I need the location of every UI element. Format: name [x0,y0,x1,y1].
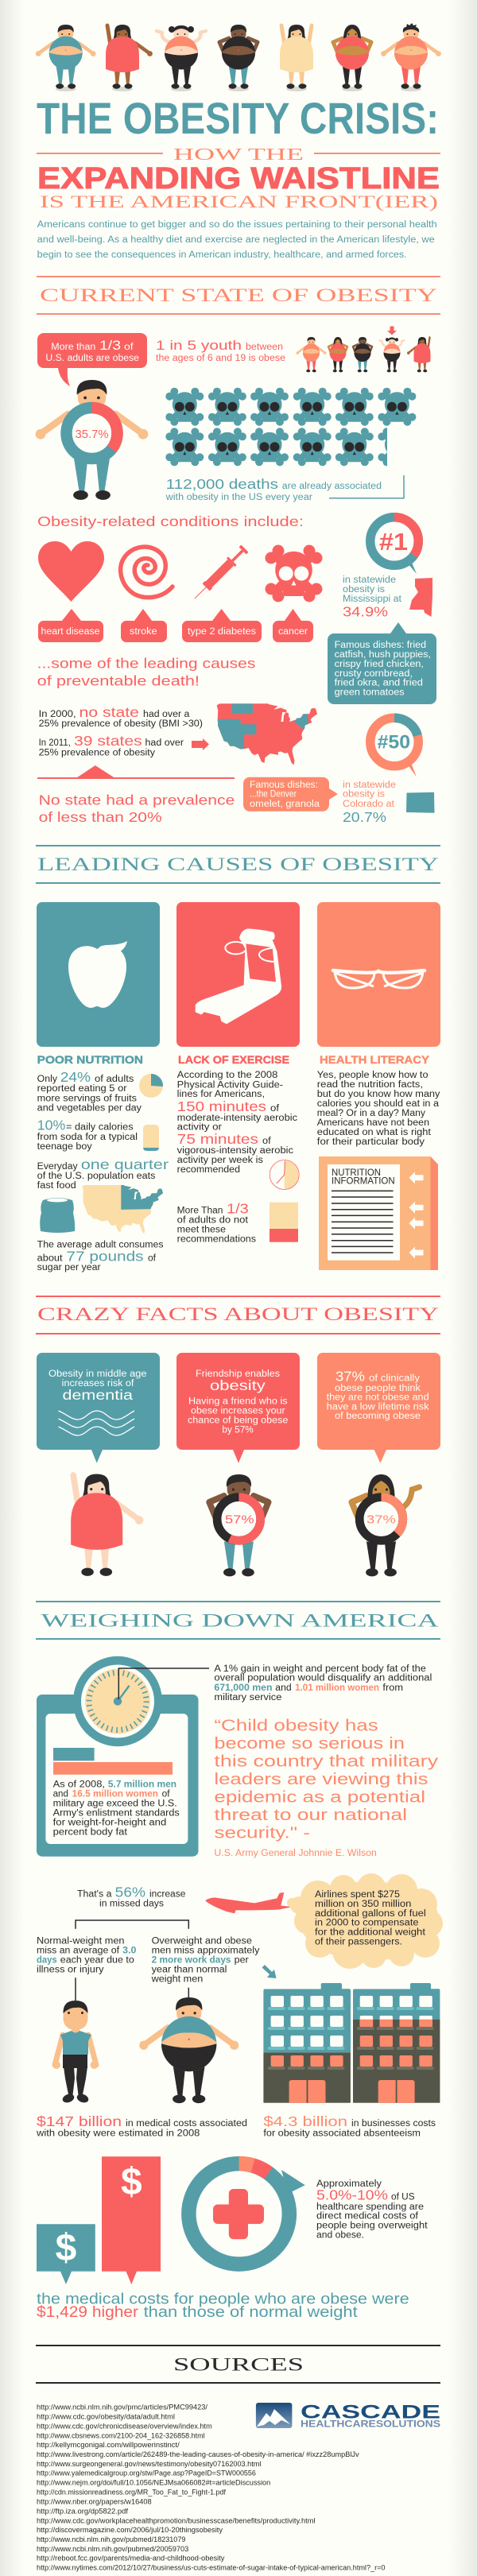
Mississippi stat [343,575,402,620]
callout: Mississippi dishes: crispy fried chicken, [335,660,424,669]
column: poor nutrition: teenage boy [37,1142,92,1152]
rank 1 ring [370,517,418,574]
column: lack of exercise: recommended [177,1165,240,1175]
text: no state under 20% [37,765,235,825]
column: poor nutrition: 10% [37,1118,65,1133]
subtitle: IS THE AMERICAN FRONT(IER) [40,192,438,211]
fact card: friendship: Having a friend who is [188,1397,288,1407]
illustration: weighing scale: for weight-for-height and [53,1819,166,1828]
text: state prevalence comparison: had over [145,738,184,748]
text: no state under 20%: of less than 20% [39,809,162,825]
leader line [118,1668,209,1699]
illustration: weighing scale [37,1656,199,1857]
source list [37,2404,385,2573]
illustration: weighing scale: and [53,1790,68,1799]
icon: cancer skull [266,545,323,602]
Colorado stat: obesity is [343,790,385,800]
source list: http://discovermagazine.com/2006/jul/10-20thingsobesity [37,2526,223,2535]
text: 1% gain: 1.01 million women [295,1683,379,1693]
column: lack of exercise: recommendations [177,1235,256,1245]
text: 1% gain: from [382,1683,403,1693]
illustration: weighing scale: of [162,1790,170,1799]
text: 1% gain: military service [214,1693,281,1702]
column: lack of exercise: vigorous-intensity aerobic [177,1146,293,1156]
section heading: weighing down america: WEIGHING DOWN AMERICA [41,1610,439,1630]
quote: epidemic as a potential [214,1789,425,1807]
stat: $4.3 billion [263,2113,436,2138]
text: healthcare spending: and obese. [316,2230,364,2240]
callout: one third of adults: More than [51,343,95,352]
section heading: leading causes: LEADING CAUSES OF OBESITY [37,854,440,874]
fact card: 37%: of becoming obese [335,1412,421,1421]
text: 1% gain: A 1% gain in weight and percent body fat of the [214,1664,426,1674]
source list: http://www.cbsnews.com/2100-204_162-326858.html [37,2431,205,2440]
condition labels: heart disease [41,627,100,637]
text: leading causes of preventable death [37,656,256,689]
text: medical cost difference: than those of normal weight [144,2304,359,2321]
column: poor nutrition: one quarter [81,1156,169,1172]
fact card: 37%: they are not obese and [327,1393,429,1403]
illustration: right building [353,1983,440,2103]
heading: conditions: Obesity-related conditions include: [37,513,304,529]
column: health literacy: calories you should eat in a [317,1099,440,1109]
text: overweight men: men miss approximately [152,1947,260,1956]
card: poor nutrition apple [37,902,160,1047]
text: normal-weight men: Normal-weight men [37,1937,124,1947]
column: poor nutrition: reported eating 5 or [37,1084,127,1094]
column: poor nutrition: and vegetables per day [37,1104,142,1114]
subtitle [37,145,440,211]
stat: 1 in 5 youth: 1 in 5 youth [156,338,242,353]
column: poor nutrition: of [148,1254,157,1264]
figure: overweight man [139,1997,238,2103]
stat: $4.3 billion: in businesses costs [351,2119,436,2129]
column: poor nutrition: 77 pounds [66,1249,144,1265]
Mississippi stat: obesity is [343,585,385,595]
illustration: weighing scale: 16.5 million women [72,1790,158,1799]
fact card: friendship: by 57% [222,1425,254,1435]
rank 50 ring [370,718,418,777]
text: 56% increase: That's a [77,1890,112,1900]
section heading: crazy facts: CRAZY FACTS ABOUT OBESITY [37,1304,440,1324]
column: health literacy: but do you know how many [317,1090,440,1099]
illustration: weighing scale: As of 2008, [53,1780,105,1790]
column: health literacy: Americans have not been [317,1118,429,1128]
connector lines [76,1978,188,2001]
fact card: 37%: obese people think [335,1384,421,1393]
text: 56% increase: increase [149,1890,185,1900]
source list: http://www.nber.org/papers/w16408 [37,2498,152,2507]
column: lack of exercise: 150 minutes [177,1098,266,1114]
callout: one third of adults [37,333,147,386]
source list: http://www.nejm.org/doi/full/10.1056/NEJMsa066082#t=articleDiscussion [37,2479,270,2488]
column: lack of exercise: of adults do not [177,1216,249,1226]
card: lack of exercise treadmill [176,902,300,1047]
section heading: current state: CURRENT STATE OF OBESITY [40,285,438,305]
quote: this country that military [214,1753,438,1771]
illustration: weighing scale: 5.7 million men [108,1780,176,1790]
text: medical cost difference: $1,429 higher [37,2304,139,2321]
intro text: and well-being. As a healthy diet and exercise are neglected in the American lifestyle, we [37,235,435,245]
callout: Mississippi dishes: catfish, hush puppies, [335,650,431,660]
bar chart: men and women over standards [53,1748,173,1775]
text: healthcare spending: Approximately [316,2179,382,2189]
Mississippi stat: in statewide [343,575,396,585]
callout: Mississippi dishes: Famous dishes: fried [335,641,426,650]
fact card: dementia: Obesity in middle age [48,1369,146,1379]
source list: http://www.surgeongeneral.gov/news/testimony/obesity07162003.html [37,2460,261,2469]
small children row [297,337,431,372]
column: poor nutrition: The average adult consumes [37,1241,164,1250]
text: 1% gain [214,1664,432,1702]
figure with 35.7% ring: 35.7% [75,428,108,441]
icon: medical cross [213,2189,264,2239]
callout: one third of adults: U.S. adults are obese [45,354,139,363]
text: 1% gain: and [275,1683,292,1693]
column: poor nutrition: = daily calories [66,1123,134,1133]
column: lack of exercise: 75 minutes [177,1131,258,1147]
chart: medical cost bars: $ [121,2161,142,2203]
text: overweight men: weight men [150,1974,203,1984]
source list: http://www.cdc.gov/obesity/data/adult.html [37,2413,175,2422]
column: poor nutrition: from soda for a typical [37,1133,138,1142]
fact card: 37%: of clinically [369,1374,420,1384]
text: 56% increase: in missed days [99,1900,164,1909]
text: state prevalence comparison: 39 states [74,733,142,749]
column: poor nutrition: Only [37,1075,57,1084]
text: healthcare spending: direct medical costs of [316,2212,419,2222]
column: poor nutrition: of adults [95,1075,134,1084]
fact card: friendship: chance of being obese [188,1416,288,1426]
stat: 1 in 5 youth: between [246,343,283,352]
source list: http://www.livestrong.com/article/262489-the-leading-causes-of-obesity-in-america/ #ixzz28umpBlJv [37,2450,359,2459]
column: lack of exercise [177,1053,299,1245]
arrow pointing at child [387,326,397,335]
source list: http://www.cdc.gov/chronicdisease/overview/index.htm [37,2422,212,2431]
text: healthcare spending: people being overweight [316,2221,429,2230]
Colorado stat [343,781,396,825]
stat: $147 billion: $147 billion [37,2113,122,2129]
bracket [76,1920,188,1929]
text: overweight men: year than normal [152,1965,227,1974]
Mississippi stat: Mississippi at [343,595,402,604]
illustration: weighing scale: military age exceed the U.S. [53,1799,177,1809]
column: lack of exercise: activity per week is [177,1156,263,1165]
fact card: dementia: increases risk of [62,1379,134,1389]
Mississippi stat: 34.9% [343,604,388,620]
quote: threat to our national [214,1807,407,1824]
condition labels: cancer [278,627,308,637]
fact card: friendship: obesity [210,1377,266,1393]
column: poor nutrition: POOR NUTRITION [37,1053,143,1066]
quote: “Child obesity has [214,1717,378,1734]
column: health literacy: for their particular body [317,1137,425,1147]
condition labels: type 2 diabetes [188,627,256,637]
fact card: 37%: have a low lifetime risk [327,1403,429,1412]
stat: 112,000 deaths [165,475,404,502]
text: 1% gain: overall population would disqualify an additional [214,1674,432,1683]
column: lack of exercise: activity or [177,1123,222,1133]
card: health literacy glasses [317,902,440,1047]
illustration: weighing scale: Army's enlistment standards [53,1809,180,1819]
fact card: 37% [317,1353,440,1463]
fact card: friendship: obese increases your [191,1407,285,1416]
column: health literacy: read the nutrition facts, [317,1080,423,1090]
text: state prevalence comparison [39,704,203,758]
figure: woman with 37% ring [351,1474,420,1576]
text: normal-weight men: 3.0 [122,1947,137,1956]
column: poor nutrition: 24% [60,1069,91,1085]
intro text: begin to see the consequences in American industry, healthcare, and armed forces. [37,250,407,260]
text: state prevalence comparison: 25% prevalence of obesity [39,749,155,758]
column: lack of exercise: More Than [177,1207,223,1216]
text: leading causes of preventable death: of preventable death! [37,673,200,689]
column: lack of exercise: According to the 2008 [177,1071,277,1080]
icon: nutrition label book: INFORMATION [332,1177,395,1187]
subtitle: HOW THE [173,145,304,164]
callout: Colorado dishes: omelet, granola [250,800,320,809]
callout: Mississippi dishes: green tomatoes [335,688,405,698]
column: poor nutrition [37,1053,173,1273]
condition labels [38,609,313,642]
callout: one third of adults: 1/3 [99,338,121,353]
fact card: 37%: 37% [335,1369,365,1385]
text: healthcare spending [316,2179,429,2240]
icon: Colorado map [406,792,434,813]
column: lack of exercise: LACK OF EXERCISE [178,1053,289,1066]
text: 56% increase [77,1885,185,1909]
text: leading causes of preventable death: ...some of the leading causes [37,656,256,672]
person 5 [280,25,313,91]
fact card: friendship [176,1353,300,1463]
text: state prevalence comparison: In 2011, [39,738,71,748]
fact card: dementia: dementia [62,1387,133,1403]
icon: soda can [143,1125,159,1151]
icon: sugar bag [40,1198,75,1233]
source list: http://www.yalemedicalgroup.org/stw/Page.asp?PageID=STW000556 [37,2469,256,2478]
text: medical cost difference: the medical costs for people who are obese were [37,2291,409,2307]
section heading: sources: SOURCES [173,2354,304,2374]
logo: Cascade Healthcare Solutions: CASCADE [301,2402,440,2423]
column: health literacy: HEALTH LITERACY [320,1053,430,1066]
quote: become so serious in [214,1735,405,1753]
text: state prevalence comparison: no state [80,704,139,720]
source list: http://www.ncbi.nlm.nih.gov/pubmed/18231079 [37,2535,185,2544]
text: normal-weight men: miss an average of [37,1947,120,1956]
icon: syringe [191,544,249,602]
Colorado stat: in statewide [343,781,396,790]
column: lack of exercise: meet these [177,1226,226,1235]
column: health literacy: meal? Or in a day? Many [317,1109,425,1118]
column: poor nutrition: sugar per year [37,1263,101,1273]
callout: Colorado dishes: Famous dishes: [250,781,318,790]
stat: 112,000 deaths: 112,000 deaths [166,476,278,492]
intro text [37,220,437,260]
callout: airline fuel cloud [287,1873,443,1969]
Colorado stat: 20.7% [343,809,386,825]
callout: airline fuel cloud: of their passengers. [315,1938,402,1947]
column: lack of exercise: Physical Activity Guide- [177,1080,283,1090]
chart: one third bar [270,1203,298,1242]
person 3 [157,25,206,91]
figure: man with 57% ring: 57% [225,1513,254,1527]
text: medical cost difference [37,2291,409,2321]
text: state prevalence comparison: 25% prevalence of obesity (BMI >30) [39,719,203,729]
illustration: row of seven people [36,23,441,91]
column: lack of exercise: of [270,1104,280,1114]
callout: Colorado dishes: ...the Denver [250,790,297,800]
column: health literacy: educated on what is right [317,1128,432,1137]
quote: security." - [214,1825,310,1842]
column: lack of exercise: of [262,1137,271,1146]
arrow to map [192,738,209,750]
text: normal-weight men: days [37,1956,57,1966]
text: overweight men [150,1937,260,1984]
stat: 112,000 deaths: with obesity in the US every year [165,493,312,502]
stat: 112,000 deaths: are already associated [282,482,382,491]
rank 1 ring: #1 [379,528,408,556]
text: overweight men: Overweight and obese [152,1937,252,1947]
column: lack of exercise: 1/3 [227,1201,249,1217]
icon: stroke spiral [121,547,173,598]
text: healthcare spending: of US [391,2192,415,2202]
source list: http://ftp.iza.org/dp5822.pdf [37,2507,128,2516]
source list: http://www.ncbi.nlm.nih.gov/pubmed/20059703 [37,2545,188,2554]
chart: medical cost bars [37,2156,161,2284]
callout: airline fuel cloud: additional gallons of fuel [315,1909,426,1919]
icon: nutrition label book [319,1156,438,1270]
chart: medical cost bars: $ [56,2227,77,2269]
figure: woman with 37% ring: 37% [366,1513,396,1527]
column: health literacy [317,1053,440,1270]
text: state prevalence comparison: had over a [143,710,190,719]
illustration: weighing scale: percent body fat [53,1828,128,1838]
logo: Cascade Healthcare Solutions: HEALTHCARESOLUTIONS [301,2419,440,2429]
source list: http://cdn.missionreadiness.org/MR_Too_Fat_to_Fight-1.pdf [37,2489,226,2497]
text: healthcare spending: healthcare spending are [316,2202,424,2212]
text: healthcare spending: 5.0%-10% [316,2187,388,2202]
logo: Cascade Healthcare Solutions [256,2402,440,2429]
stat: $4.3 billion: $4.3 billion [263,2113,347,2129]
icon: airplane [205,1892,293,1913]
stat: 1 in 5 youth [156,338,285,363]
text: normal-weight men: each year due to [60,1956,134,1966]
figure: normal weight man [52,2001,99,2104]
map: one quarter fast food [83,1185,163,1234]
skull grid [165,388,416,466]
quote: U.S. Army General Johnnie E. Wilson [214,1849,377,1858]
text: overweight men: per [235,1956,249,1966]
callout: Mississippi dishes: crusty cornbread, [335,669,413,679]
stat: $147 billion: in medical costs associated [126,2119,247,2129]
source list: http://reboot.fcc.gov/parents/media-and-childhood-obesity [37,2555,225,2563]
column: poor nutrition: fast food [37,1181,76,1191]
figure: woman in dress [71,1474,143,1576]
icon: nutrition label book: NUTRITION [332,1168,381,1178]
pie chart: 24% [139,1074,163,1098]
source list: http://www.nytimes.com/2012/10/27/business/us-cuts-estimate-of-sugar-intake-of-typical-american.html?_r=0 [37,2564,385,2573]
rank 50 ring: #50 [378,732,410,753]
source list: http://www.cdc.gov/workplacehealthpromotion/businesscase/benefits/productivity.html [37,2516,315,2525]
column: health literacy: Yes, people know how to [317,1071,428,1080]
person 2 [106,25,153,91]
text: state prevalence comparison: In 2000, [39,710,76,719]
fact card: dementia [37,1353,160,1463]
source list: http://www.ncbi.nlm.nih.gov/pmc/articles/PMC99423/ [37,2404,207,2412]
callout: airline fuel cloud: Airlines spent $275 [315,1890,400,1900]
condition labels: stroke [130,627,157,637]
person 7 [381,23,441,91]
column: poor nutrition: more servings of fruits [37,1094,137,1104]
callout: airline fuel cloud: for the additional weight [315,1928,426,1938]
figure with 35.7% ring [36,380,148,500]
intro text: Americans continue to get bigger and so do the issues pertaining to their personal health [37,220,437,230]
text: 56% increase: 56% [115,1885,145,1900]
quote: leaders are viewing this [214,1771,428,1788]
fact card: friendship: Friendship enables [196,1369,280,1379]
person 6 [333,25,371,91]
chart: healthcare spending ring [188,2163,305,2264]
icon: clock [270,1160,299,1189]
callout: airline fuel cloud: million on 350 million [315,1900,411,1909]
Colorado stat: Colorado at [343,800,395,809]
text: normal-weight men: illness or injury [37,1965,104,1974]
source list: http://kellymcgonigal.com/willpowerinstinct/ [37,2441,180,2450]
text: normal-weight men [37,1937,137,1974]
icon: Mississippi map [409,578,432,617]
arrow to buildings [262,1965,277,1978]
person 4 [219,25,258,91]
callout: one third of adults: of [124,343,134,352]
figure: man with 57% ring [209,1474,269,1576]
callout: Mississippi dishes: fried okra, and fried [335,679,423,688]
callout: airline fuel cloud: in 2000 to compensate [315,1919,419,1928]
column: poor nutrition: of the U.S. population eats [37,1172,156,1181]
stat: $147 billion [36,2113,247,2138]
callout: Mississippi dishes [328,622,436,704]
text: overweight men: 2 more work days [152,1956,231,1966]
subtitle: EXPANDING WAISTLINE [37,162,440,196]
text: no state under 20%: No state had a prevalence [39,792,235,808]
text: 1% gain: 671,000 men [214,1683,272,1693]
icon: heart [38,541,104,602]
map: US obesity 2011 [215,701,317,765]
stat: $4.3 billion: for obesity associated absenteeism [263,2129,421,2138]
stat: 1 in 5 youth: the ages of 6 and 19 is obese [156,354,285,363]
quote [214,1717,438,1858]
column: poor nutrition: Everyday [37,1162,78,1172]
person 1 [36,25,96,91]
column: poor nutrition: about [37,1254,63,1264]
callout: Colorado dishes [243,777,338,812]
column: lack of exercise: lines for Americans, [177,1090,265,1099]
stat: $147 billion: with obesity were estimated in 2008 [36,2129,200,2138]
illustration: left building [263,1983,351,2103]
column: lack of exercise: moderate-intensity aerobic [177,1114,297,1123]
